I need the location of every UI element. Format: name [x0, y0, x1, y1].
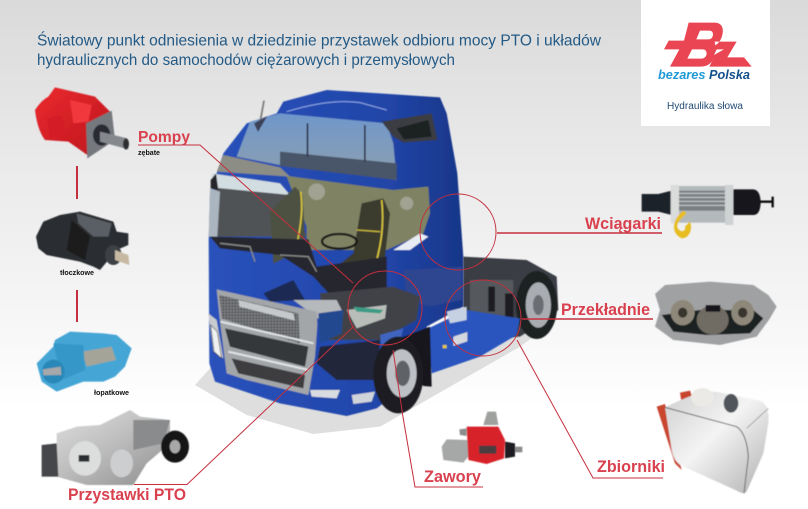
front wheel [373, 327, 432, 413]
heading [37, 30, 601, 69]
rear chassis and rear wheel [463, 257, 558, 340]
grille [217, 289, 343, 395]
antenna [259, 101, 264, 130]
label: tłoczkowe: tłoczkowe [60, 270, 94, 277]
label: zębate: zębate [138, 150, 160, 157]
label: Przekładnie: Przekładnie [561, 301, 650, 319]
logo mark Bz [664, 23, 752, 67]
driver seat [337, 198, 390, 277]
label: Zawory: Zawory [424, 468, 482, 486]
icon: winch [642, 185, 773, 238]
label: Pompy: Pompy [138, 129, 190, 146]
frame underside [403, 267, 462, 307]
ground shadow [195, 325, 550, 434]
windscreen [210, 183, 307, 237]
dashboard [210, 237, 387, 297]
icon: gearbox [655, 282, 777, 345]
label: Przystawki PTO: Przystawki PTO [68, 486, 186, 504]
logo wordmark: bezares Polska [658, 67, 750, 82]
air deflector [382, 113, 437, 143]
steering wheel [322, 234, 357, 249]
front suspension [317, 340, 380, 380]
logo panel [641, 0, 770, 126]
truck [195, 90, 558, 434]
icon: vane pump [37, 332, 132, 392]
heading: Światowy punkt odniesienia w dziedzinie przystawek odbioru mocy PTO i układów [37, 30, 601, 50]
roof glass [237, 113, 397, 180]
sleeper interior [280, 175, 430, 250]
bumper lights [310, 390, 340, 398]
callout circles and leader lines [77, 145, 663, 487]
label: Wciągarki: Wciągarki [585, 215, 661, 233]
roof highlights [287, 102, 387, 112]
tagline: Hydraulika słowa [667, 101, 743, 112]
passenger seat [270, 187, 305, 263]
headlamp [208, 313, 223, 358]
icon: PTO gearbox [42, 410, 189, 485]
icon: hydraulic tank [657, 388, 769, 493]
step vent [380, 328, 403, 347]
heading: hydraulicznych do samochodów ciężarowych i przemysłowych [37, 52, 455, 69]
sill highlight [393, 233, 428, 250]
icon: piston pump [36, 212, 129, 270]
cab body [208, 90, 520, 416]
side skirt [428, 310, 520, 373]
label: łopatkowe: łopatkowe [94, 390, 129, 397]
icon: valve [442, 412, 522, 464]
icon: gear pump [35, 87, 129, 158]
label: Zbiorniki: Zbiorniki [597, 458, 665, 476]
